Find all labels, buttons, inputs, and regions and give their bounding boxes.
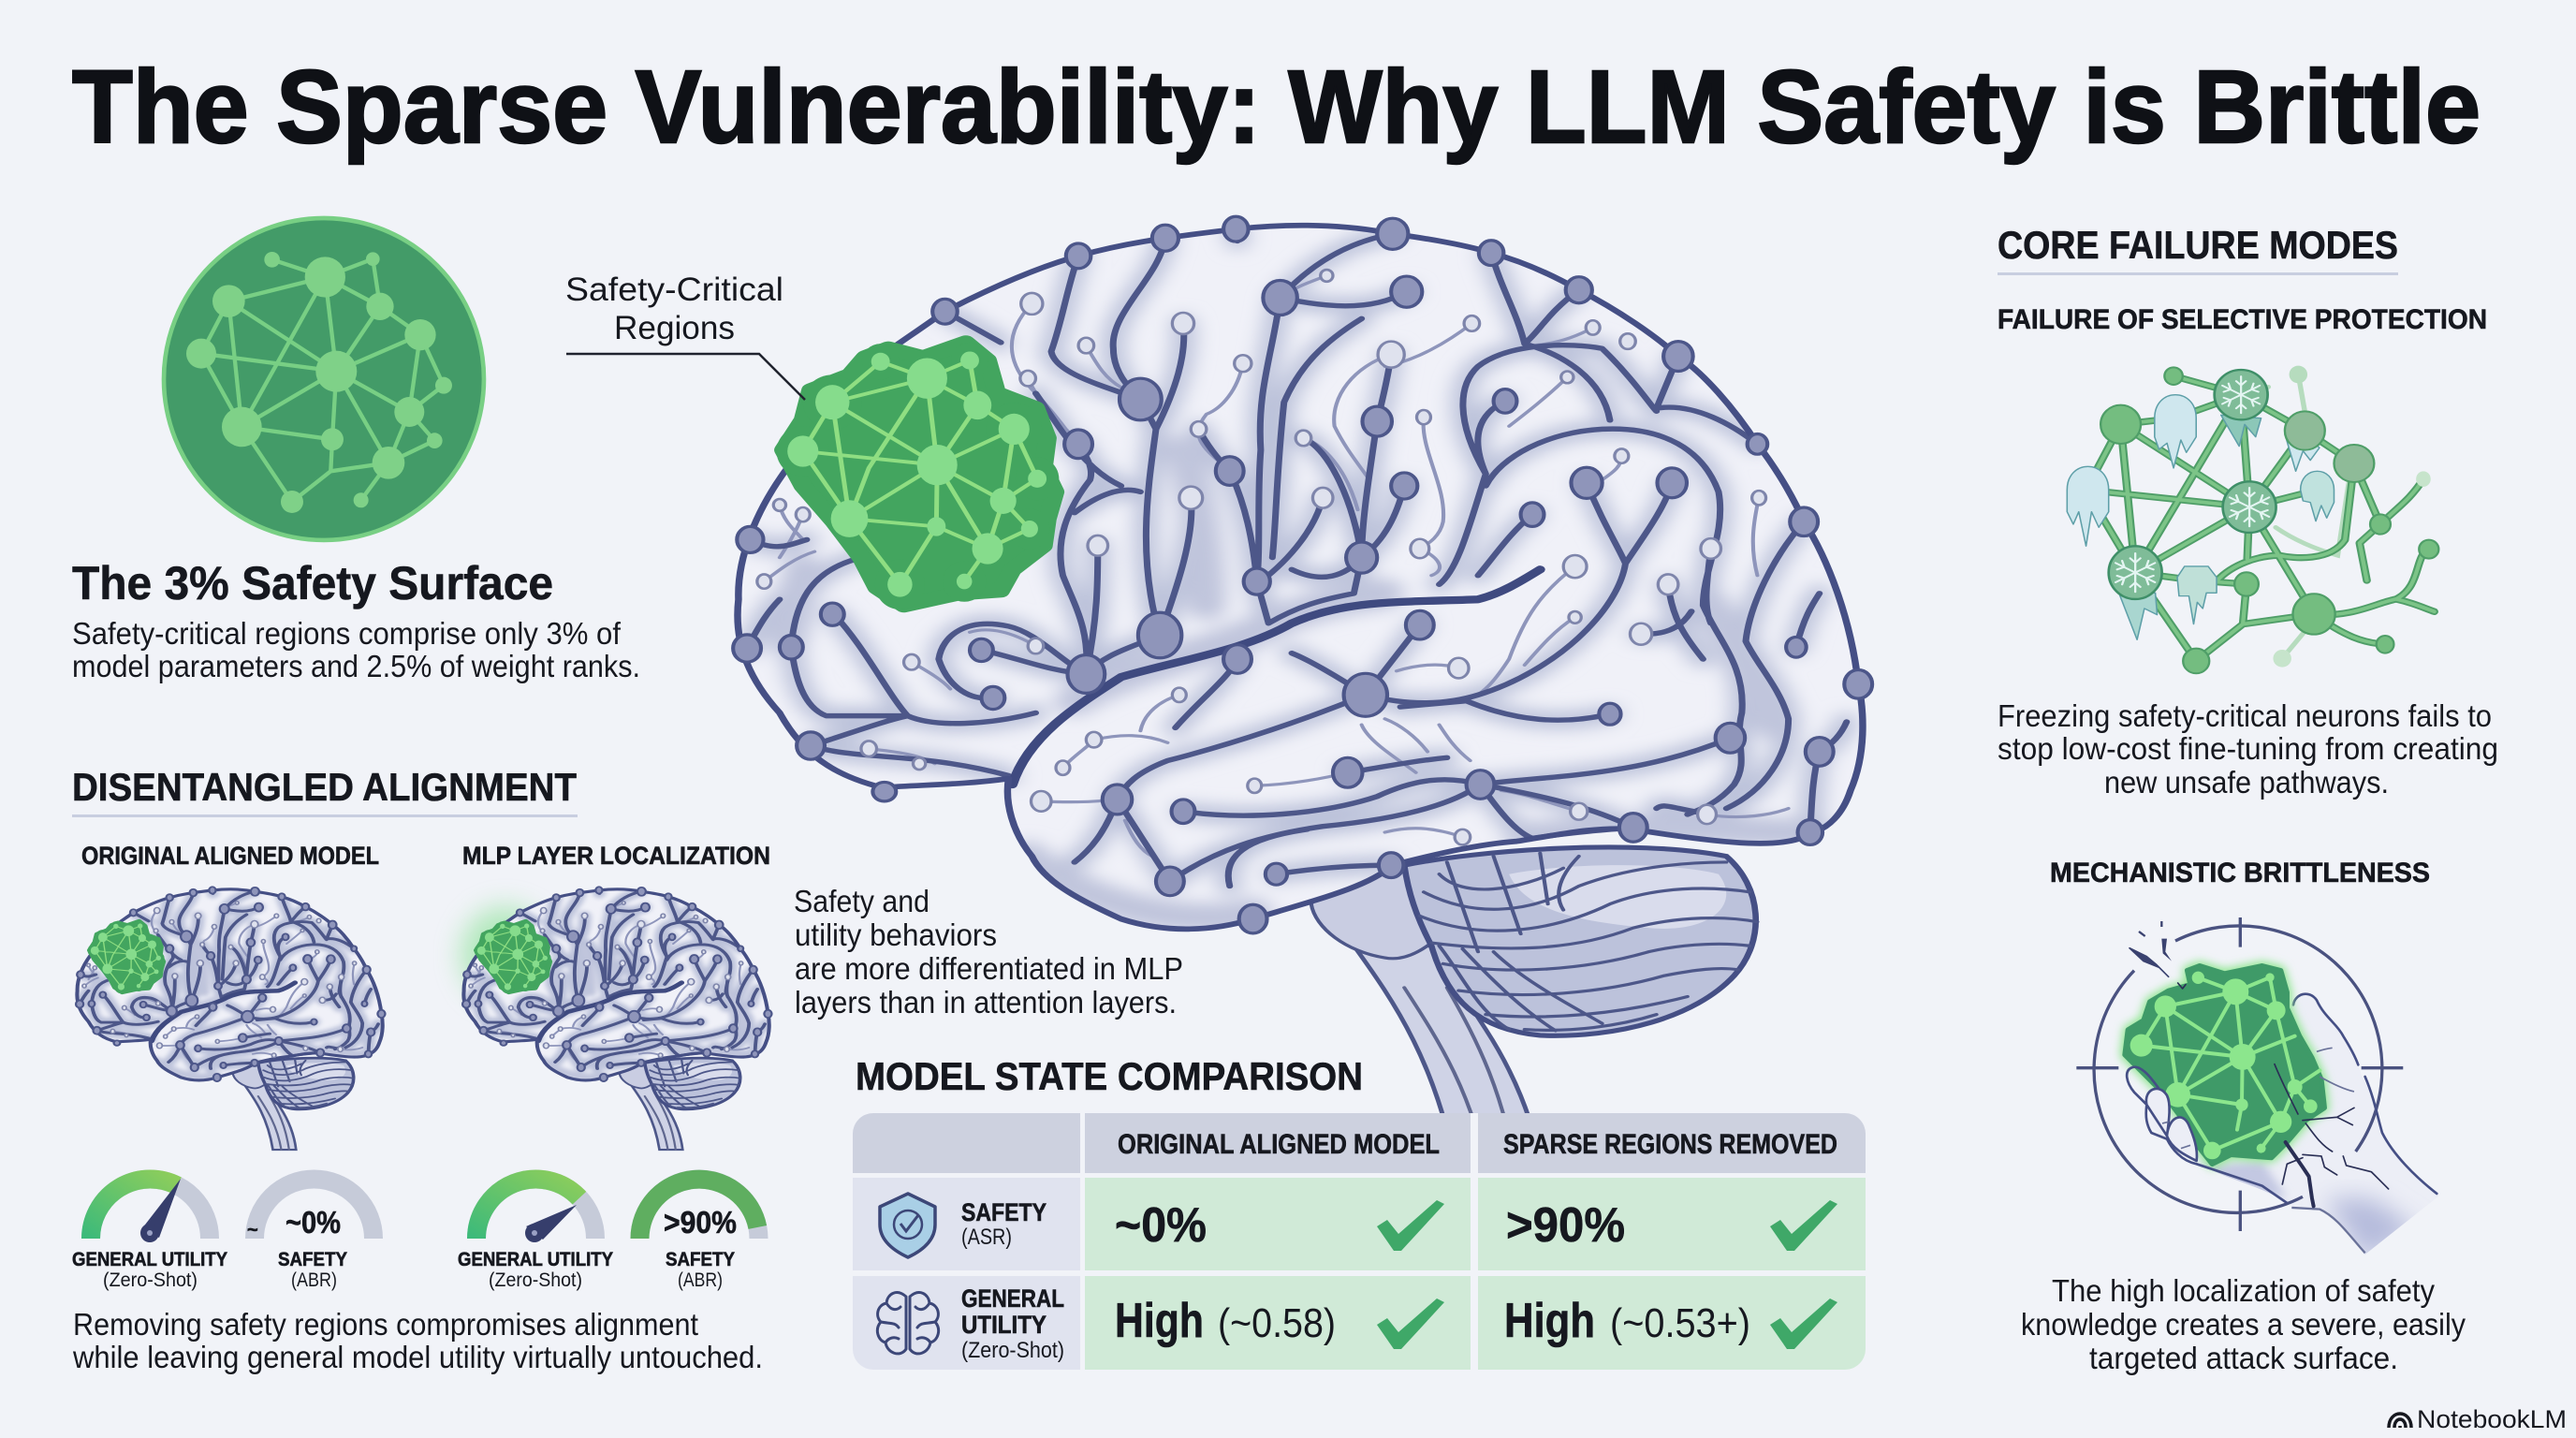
gauge: general utility original [72, 1179, 227, 1291]
gauge: safety original: (ABR) [291, 1269, 337, 1291]
panel: disentangled alignment [72, 765, 771, 1374]
text: freezing fails: Freezing safety-critical neurons fails to [1998, 698, 2492, 733]
heading: 3% safety surface: The 3% Safety Surface [72, 557, 553, 609]
text: MLP differentiation note: layers than in attention layers. [795, 985, 1177, 1020]
table cells [853, 1113, 1866, 1370]
text: MLP differentiation note: utility behaviors [795, 917, 997, 952]
cell: safety removed [1506, 1198, 1837, 1253]
icon: frozen neuron network [2067, 366, 2438, 673]
text: localization brittleness [2021, 1273, 2466, 1375]
column header: sparse regions removed: SPARSE REGIONS REMOVED [1503, 1129, 1837, 1160]
cell: utility original: High [1115, 1294, 1204, 1348]
panel: 3% safety surface [72, 218, 640, 683]
heading: model state comparison: MODEL STATE COMPARISON [856, 1054, 1363, 1098]
table [853, 1113, 1866, 1370]
row label: safety [961, 1198, 1046, 1250]
row label: general utility: GENERAL [961, 1284, 1064, 1313]
heading: core failure modes: CORE FAILURE MODES [1998, 223, 2398, 267]
subheading: mechanistic brittleness: MECHANISTIC BRITTLENESS [2050, 858, 2430, 888]
mini brain: MLP layer with glow [461, 887, 771, 1150]
gauge: safety original: SAFETY [278, 1249, 347, 1270]
text: freezing fails: stop low-cost fine-tuning from creating [1998, 731, 2498, 766]
gauge: safety original: ~0% [285, 1205, 341, 1240]
callout: safety-critical regions [565, 271, 805, 400]
cell: safety original [1115, 1198, 1444, 1253]
text: freezing fails: new unsafe pathways. [2104, 765, 2389, 800]
gauge: general utility original: (Zero-Shot) [103, 1269, 198, 1291]
text: alignment summary [72, 1307, 763, 1374]
gauge: general utility after removal: GENERAL UTILITY [458, 1249, 613, 1270]
text: freezing fails [1998, 698, 2498, 800]
text: alignment summary: Removing safety regions compromises alignment [73, 1307, 698, 1342]
illustration: central brain with green safety region [733, 216, 1872, 1184]
row label: safety: (ASR) [961, 1225, 1012, 1250]
icon: shield [880, 1194, 935, 1257]
cell: safety original: ~0% [1115, 1198, 1207, 1253]
gauge: safety after removal: SAFETY [666, 1249, 735, 1270]
icon: cracked hand holding network in a target [2076, 917, 2440, 1261]
gauge: safety after removal [640, 1180, 758, 1291]
cell: safety removed: >90% [1506, 1198, 1625, 1253]
row label: general utility: (Zero-Shot) [961, 1338, 1064, 1363]
cell: utility original [1115, 1294, 1444, 1349]
icon: brain [877, 1293, 939, 1354]
gauge: general utility original: GENERAL UTILITY [72, 1249, 227, 1270]
gauge: safety after removal: (ABR) [678, 1269, 723, 1291]
callout: safety-critical regions: Regions [614, 310, 735, 346]
row label: general utility [961, 1284, 1064, 1363]
text: localization brittleness: The high localization of safety [2052, 1273, 2435, 1308]
text: MLP differentiation note: Safety and [794, 884, 929, 918]
row label: safety: SAFETY [961, 1198, 1046, 1226]
heading: disentangled alignment: DISENTANGLED ALIGNMENT [72, 765, 577, 809]
gauge: general utility after removal [458, 1180, 613, 1291]
text: alignment summary: while leaving general model utility virtually untouched. [72, 1340, 763, 1374]
text: localization brittleness: targeted attack surface. [2089, 1341, 2398, 1375]
text: MLP differentiation note: are more differentiated in MLP [795, 951, 1183, 986]
label: MLP layer localization: MLP LAYER LOCALIZATION [462, 842, 770, 870]
text: safety surface description: Safety-critical regions comprise only 3% of [72, 616, 622, 651]
panel: model state comparison [853, 1054, 1866, 1370]
gauge: general utility after removal: (Zero-Shot) [489, 1269, 582, 1291]
cell: utility original: (~0.58) [1218, 1300, 1336, 1346]
watermark: NotebookLM: NotebookLM [2417, 1405, 2567, 1433]
panel: core failure modes [1998, 223, 2498, 1375]
mini brain: original model [76, 887, 385, 1150]
cell: utility removed: High [1504, 1294, 1595, 1348]
cell: utility removed [1504, 1294, 1837, 1349]
cell: utility removed: (~0.53+) [1610, 1300, 1750, 1346]
gauge: safety after removal: >90% [664, 1205, 737, 1240]
label: original aligned model: ORIGINAL ALIGNED MODEL [81, 842, 379, 870]
text: safety surface description [72, 616, 640, 683]
callout: safety-critical regions: Safety-Critical [565, 271, 783, 308]
subheading: failure of selective protection: FAILURE OF SELECTIVE PROTECTION [1998, 304, 2487, 335]
text: MLP differentiation note [794, 884, 1183, 1020]
row label: general utility: UTILITY [961, 1311, 1046, 1339]
text: localization brittleness: knowledge creates a severe, easily [2021, 1307, 2466, 1342]
text: safety surface description: model parameters and 2.5% of weight ranks. [72, 649, 640, 683]
gauge: safety original [247, 1180, 373, 1291]
column header: original aligned model: ORIGINAL ALIGNED MODEL [1118, 1129, 1440, 1160]
gauge: safety original: ~ [247, 1220, 258, 1240]
title: The Sparse Vulnerability: Why LLM Safety is Brittle [72, 50, 2481, 165]
icon: green network circle [164, 218, 484, 540]
